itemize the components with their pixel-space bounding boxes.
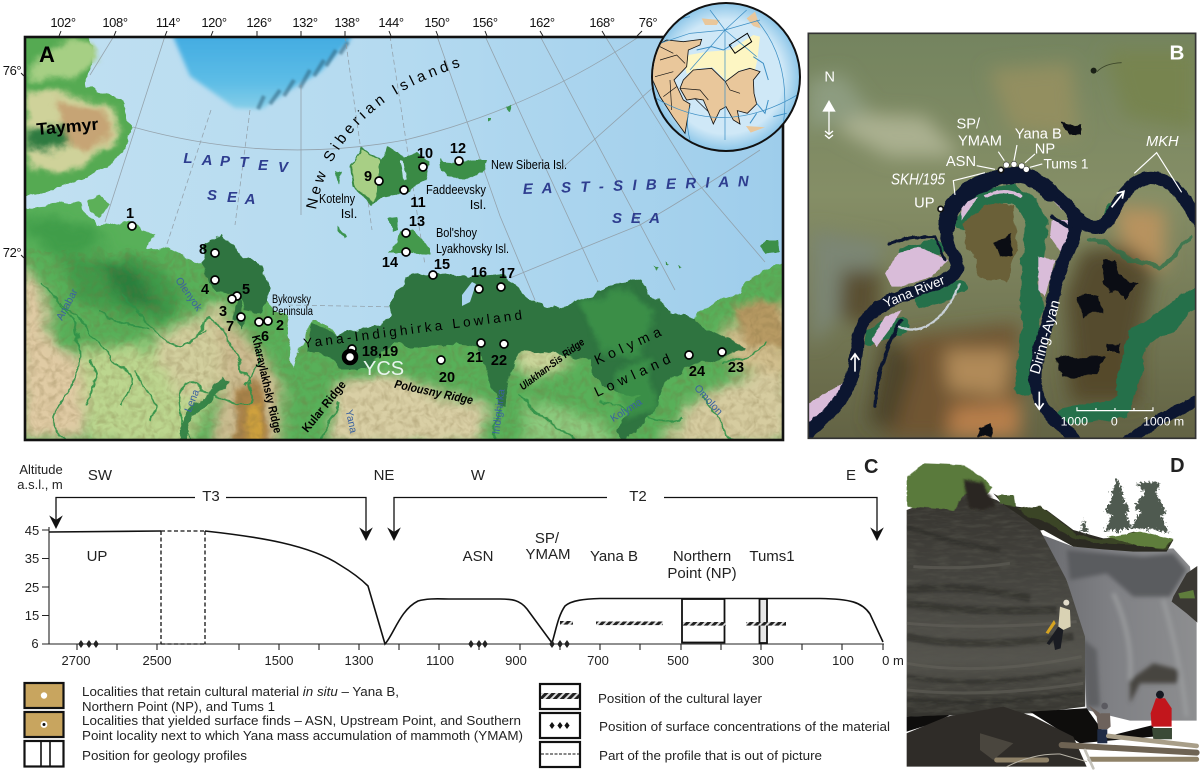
river names: Anabar [54,286,81,322]
axes with ticks [42,527,884,650]
dark lowlands [200,234,742,445]
legend: surface find localities: Point locality next to which Yana mass accumulation of mammoth (YMAM) [82,728,523,743]
direction labels [88,467,856,484]
label Laptev Sea [183,150,290,208]
scale bar: 1000 [1061,415,1088,429]
direction labels: W [471,467,486,484]
lowland names [303,310,671,396]
legend: in situ localities [24,683,399,714]
relief texture [26,248,782,439]
driftwood logs [997,736,1197,768]
axis numbers: 1300 [345,653,373,668]
lowland names: Kolyma [594,330,662,364]
site numbers: 16 [471,265,487,281]
legend: geology profiles [24,741,248,766]
label Laptev Sea: A [201,152,212,169]
YCS marker: YCS [363,358,404,380]
ridge names: Ulakhan-Sis Ridge [517,336,587,393]
sandbars [808,187,1078,430]
axis numbers: 900 [505,653,527,668]
panel letter B: B [1170,41,1184,64]
river channels [802,175,1200,443]
label Laptev Sea: L [183,150,193,167]
surface concentrations diamonds [78,640,570,648]
dark stratified cliff [907,490,1085,717]
T3 terrace bracket: T3 [202,488,220,505]
axis numbers: 100 [832,653,854,668]
out of picture dashes [161,531,205,644]
graticule and coasts in blue [653,10,800,143]
y axis title [17,462,63,492]
geology profile boxes [682,599,767,643]
longitude labels: 138° [334,15,360,30]
longitude labels [3,15,657,260]
longitude labels: 76° [3,63,21,78]
label Laptev Sea: T [239,154,250,171]
north arrow [822,70,836,138]
cultural layers [560,621,786,626]
dark soil under the turf [993,493,1173,552]
site numbers: 7 [226,319,234,335]
axis numbers: 300 [752,653,774,668]
island and peninsula names: Bykovsky [272,294,311,306]
river names: Yana [343,409,359,434]
locator rectangle [729,33,752,53]
panel C: topographic profile [17,456,904,668]
site labels: SKH/195 [891,171,945,188]
site numbers: 4 [201,282,209,298]
legend: out of picture: Part of the profile that is out of picture [599,748,822,763]
legend: cultural layer: Position of the cultural layer [598,691,763,706]
island and peninsula names: Kotelny [319,191,355,206]
legend: surface concentrations: Position of surface concentrations of the material [599,719,890,734]
longitude labels: 132° [292,15,318,30]
site names: SP/ [535,530,560,547]
river names: Omolon [691,382,725,418]
axis numbers: 700 [587,653,609,668]
label East-Siberian Sea: S E A [612,210,660,227]
Taymyr peninsula [26,38,132,196]
legend: out of picture [540,742,822,767]
site numbers: 14 [382,255,398,271]
axis numbers: 35 [25,551,39,566]
oxbow channel [898,283,960,330]
longitude labels: 72° [3,245,21,260]
site numbers: 21 [467,350,483,366]
dark cave under the overhang [907,708,1153,743]
site names: YMAM [526,546,570,563]
site numbers: 3 [219,304,227,320]
T2 terrace bracket [390,488,882,539]
island and peninsula names: Isl. [470,197,486,212]
panel B frame [808,33,1196,438]
longitude labels: 156° [472,15,498,30]
small lake on the lowland [462,282,476,306]
dark eroding chunk [1172,566,1197,623]
site labels: Tums 1 [1043,156,1088,171]
site numbers: 20 [439,370,455,386]
site numbers: 18,19 [362,344,398,360]
site numbers: 22 [491,353,507,369]
site labels: SP/ [957,116,981,132]
island and peninsula names: Lyakhovsky Isl. [436,241,509,256]
axis numbers: 6 [31,636,39,651]
vegetation on top [907,463,1173,550]
sea background [26,38,782,368]
north arrow: N [824,70,835,86]
label Laptev Sea: P [220,153,231,170]
longitude labels: 114° [156,15,180,30]
river names: Olenyok [172,275,205,314]
site names: UP [87,548,107,565]
site leader lines and dots [953,145,1182,195]
legend: surface find localities [24,712,523,743]
longitude labels: 126° [246,15,272,30]
longitude labels: 108° [102,15,128,30]
site numbers: 13 [409,214,425,230]
label Taymyr: Taymyr [36,115,100,139]
site labels: UP [914,196,935,212]
axis numbers: 25 [25,580,39,595]
river names [54,275,725,435]
deep basin in the Arctic Ocean [170,38,354,112]
island and peninsula names: Isl. [341,206,357,221]
label Laptev Sea: E [258,157,269,174]
ridge names: Kular Ridge [299,378,349,435]
axis numbers: 1500 [265,653,293,668]
longitude labels: 150° [424,15,450,30]
legend: cultural layer [540,684,763,709]
terrain patches [808,50,1196,438]
climbing person [1046,600,1071,650]
graticule [90,36,765,307]
site labels: MKH [1146,134,1179,150]
site labels: ASN [946,154,976,170]
scale bar: 0 [1111,415,1118,429]
site markers 1 to 24 [128,157,726,364]
island and peninsula names: Bol'shoy [436,225,477,240]
longitude labels: 76° [639,15,657,30]
river names [881,272,1064,376]
longitude labels: 102° [50,15,76,30]
legend: in situ localities: Localities that retain cultural material in situ – Yana B, [82,684,399,699]
axis numbers: 500 [667,653,689,668]
scale bar: 1000 m [1143,415,1184,429]
site labels: NP [1035,141,1055,157]
site labels [891,116,1179,212]
panel letter A: A [39,42,55,67]
axis numbers: 2700 [62,653,90,668]
site names: Point (NP) [667,565,737,582]
river names: Diring-Ayan [1028,298,1064,376]
ice-covered slope [1033,532,1197,721]
longitude labels: 162° [529,15,555,30]
site numbers: 2 [276,318,284,334]
label New Siberian Islands: New Siberian Islands [306,60,460,209]
axis numbers: 45 [25,523,39,538]
island and peninsula names: Faddeevsky [426,182,486,197]
site numbers: 5 [242,282,250,298]
site labels: YMAM [958,134,1002,150]
legend: geology profiles: Position for geology profiles [82,748,248,763]
panel B: satellite view of the Yana River [802,33,1200,443]
person in red jacket [1151,691,1172,739]
site numbers: 24 [689,364,705,380]
flow arrows [851,191,1124,409]
rubble slope [907,707,1087,767]
site numbers: 11 [410,195,426,211]
label Laptev Sea: S [207,187,217,204]
T2 terrace bracket: T2 [629,488,647,505]
national borders [655,47,740,112]
panel letter C: C [864,456,878,478]
panel letter D: D [1170,455,1185,477]
axis numbers: 15 [25,608,39,623]
Europe and Scandinavia in tan [650,39,702,133]
river names: Indighirka [490,388,508,435]
site numbers: 23 [728,360,744,376]
small pond in the north [1091,63,1122,74]
site numbers: 10 [417,146,433,162]
site names: Yana B [590,548,638,565]
y axis title: Altitude [19,462,63,477]
island and peninsula names [272,157,567,318]
direction labels: NE [374,467,394,484]
legend [24,683,890,767]
island and peninsula names: New Siberia Isl. [491,157,567,172]
direction labels: SW [88,467,113,484]
map frame [25,37,783,440]
site numbers: 15 [434,257,450,273]
legend: surface find localities: Localities that yielded surface finds – ASN, Upstream Point, and Southern [82,713,521,728]
green floodplains and interior of the bend [872,180,1200,417]
label East-Siberian Sea: E A S T - S I B E R I A N [523,173,750,198]
label Laptev Sea: E [227,189,238,206]
axis numbers: 0 m [882,653,904,668]
site numbers: 9 [364,169,372,185]
lakes [978,122,1138,438]
spruce trees [1079,478,1169,533]
ridge names [249,334,587,435]
site names [87,530,795,582]
panel A: regional relief map [3,2,801,442]
ridge names: Kharaylakhsky Ridge [249,334,285,435]
site numbers: 17 [499,266,515,282]
Asia in tan [680,68,760,124]
site names: ASN [463,548,493,565]
label Laptev Sea: A [244,191,255,208]
island and peninsula names: Peninsula [272,306,313,318]
river names: Yana River [881,272,947,311]
lowland names: Yana-Indighirka Lowland [303,310,522,348]
site names: Tums1 [749,548,795,565]
y axis title: a.s.l., m [17,477,63,492]
mainland with relief layers [26,201,782,439]
site numbers: 12 [450,141,466,157]
slope shading [1067,550,1187,717]
YCS marker [344,351,404,380]
axis numbers: 1100 [426,653,454,668]
label East-Siberian Sea [523,173,750,227]
river names: Lena [182,388,202,414]
river names: Kolyma [608,396,645,425]
site numbers: 6 [261,329,269,345]
axis numbers: 2500 [143,653,171,668]
site numbers: 1 [126,206,134,222]
legend: surface concentrations [540,713,890,738]
site numbers: 8 [199,242,207,258]
label Laptev Sea: V [278,159,290,176]
longitude labels: 168° [589,15,615,30]
axis numbers [25,523,904,668]
legend: in situ localities: Northern Point (NP), and Tums 1 [82,699,275,714]
site labels: Yana B [1015,126,1062,142]
scale bar [1061,407,1184,429]
direction labels: E [846,467,856,484]
panel D: photograph of the permafrost exposure [907,455,1197,768]
person in grey jacket [1088,703,1111,743]
longitude labels: 120° [201,15,227,30]
elevation profile [49,531,883,644]
Russia in pale yellow [685,35,760,81]
lowland names: Lowland [594,353,671,396]
T3 terrace bracket [52,488,370,539]
site names: Northern [673,548,731,565]
longitude labels: 144° [378,15,404,30]
ridge names: Polousny Ridge [393,377,475,407]
offshore islands [88,104,780,272]
river valleys [42,282,770,445]
sediment bands [907,490,1087,717]
site numbers [126,141,744,386]
locator globe [650,3,800,151]
